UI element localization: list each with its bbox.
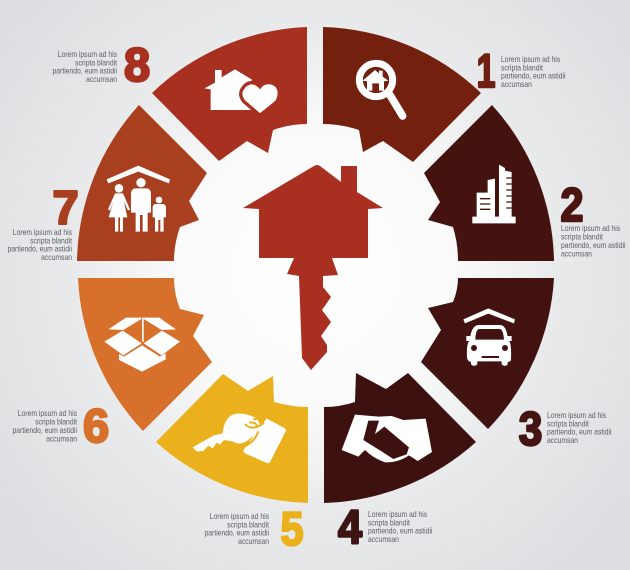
icon: family under roof	[107, 166, 170, 232]
text block 1: accumsan	[501, 79, 532, 89]
icon: house with heart	[204, 69, 279, 115]
number 3: 3	[519, 404, 542, 456]
text block 2: partiendo, eum astidii	[561, 240, 626, 250]
text block 8: scripta blandit	[75, 58, 117, 67]
text block 7: partiendo, eum astidii	[8, 244, 72, 254]
number 7: 7	[52, 181, 79, 234]
number 4: 4	[338, 500, 362, 553]
text block 3: partiendo, eum astidii	[547, 427, 612, 437]
text block 3: Lorem ipsum ad his	[547, 410, 606, 420]
text block 6: accumsan	[46, 434, 77, 444]
text block 5	[205, 511, 269, 546]
panel: segment 7	[77, 105, 207, 261]
panel: segment 5	[156, 374, 308, 503]
text block 3: scripta blandit	[547, 419, 589, 428]
text block 4: partiendo, eum astidii	[368, 526, 433, 536]
icon: car under roof	[463, 308, 515, 366]
text block 8	[53, 49, 117, 84]
text block 1: scripta blandit	[501, 63, 543, 72]
text block 2: accumsan	[561, 249, 592, 259]
icon: office buildings	[472, 165, 516, 223]
text block 1: partiendo, eum astidii	[501, 71, 566, 81]
text block 5: scripta blandit	[227, 520, 269, 529]
number 1: 1	[477, 45, 495, 97]
text block 3: accumsan	[547, 435, 578, 445]
text block 6: partiendo, eum astidii	[13, 425, 77, 435]
text block 4: scripta blandit	[368, 518, 410, 527]
icon: house under magnifier	[359, 63, 403, 116]
panel: segment 6	[78, 278, 212, 431]
text block 4: accumsan	[368, 534, 399, 544]
text block 4	[368, 509, 433, 544]
number 2: 2	[560, 180, 584, 232]
panel: segment 2	[424, 105, 554, 261]
text block 1	[501, 54, 566, 89]
text block 7: accumsan	[41, 252, 72, 262]
text block 2: Lorem ipsum ad his	[561, 223, 620, 233]
text block 8: accumsan	[86, 74, 117, 84]
text block 2: scripta blandit	[561, 232, 603, 242]
icon: handshake	[342, 415, 432, 462]
number 6: 6	[83, 399, 109, 452]
text block 5: partiendo, eum astidii	[205, 528, 269, 538]
illustration: house key	[243, 165, 383, 370]
panel: segment 3	[421, 278, 554, 429]
icon: open box	[104, 318, 180, 372]
panel: segment 8	[152, 27, 307, 161]
panel: segment 1	[323, 27, 481, 162]
text block 7: Lorem ipsum ad his	[13, 227, 72, 237]
text block 3	[547, 410, 612, 445]
text block 6	[13, 408, 77, 444]
text block 8: partiendo, eum astidii	[53, 66, 117, 76]
icon: keys with tag	[193, 414, 286, 463]
text block 8: Lorem ipsum ad his	[58, 49, 117, 59]
panel: segment 4	[324, 373, 476, 503]
text block 2	[561, 223, 626, 259]
text block 6: scripta blandit	[35, 417, 77, 427]
text block 7: scripta blandit	[30, 236, 72, 245]
text block 7	[8, 227, 72, 262]
number 8: 8	[124, 38, 150, 91]
text block 6: Lorem ipsum ad his	[18, 408, 77, 418]
number 5: 5	[280, 504, 304, 556]
text block 5: Lorem ipsum ad his	[210, 511, 269, 521]
text block 4: Lorem ipsum ad his	[368, 509, 427, 519]
text block 5: accumsan	[238, 536, 269, 546]
text block 1: Lorem ipsum ad his	[501, 54, 560, 64]
